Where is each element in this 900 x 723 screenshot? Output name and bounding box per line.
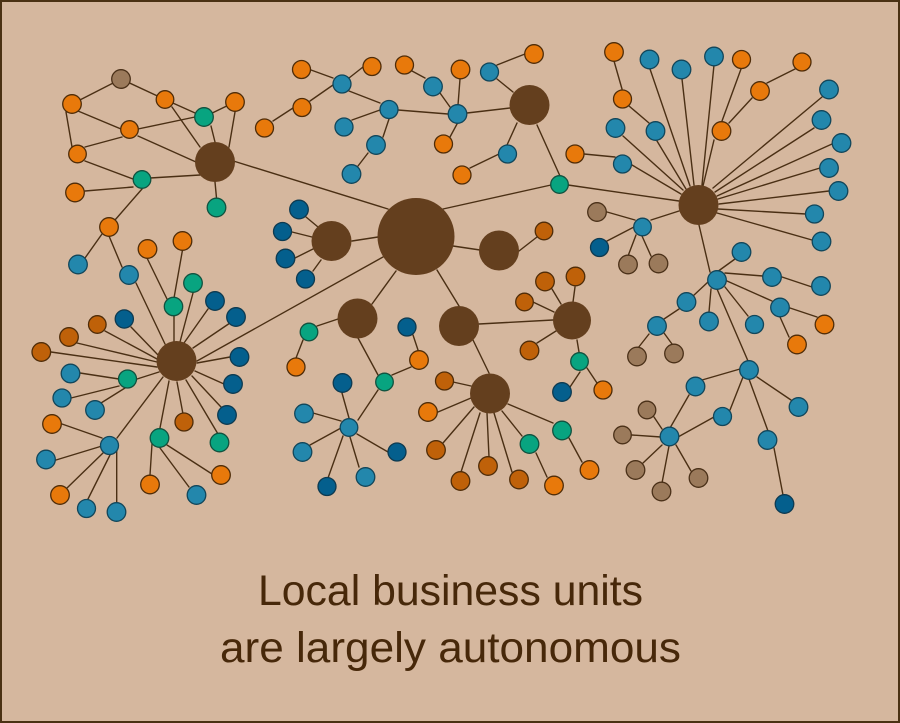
caption: Local business units bbox=[258, 567, 643, 615]
caption: are largely autonomous bbox=[220, 624, 681, 672]
cluster: top right nodes bbox=[566, 43, 851, 274]
cluster: top left nodes bbox=[63, 70, 244, 284]
cluster: lower left nodes bbox=[32, 274, 249, 521]
cluster: lower center nodes bbox=[419, 267, 612, 495]
cluster: top middle nodes bbox=[256, 45, 568, 193]
connector lines bbox=[51, 54, 832, 503]
hub nodes bbox=[156, 85, 718, 414]
central hub bbox=[378, 198, 454, 275]
caption bbox=[220, 567, 681, 672]
cluster: center nodes bbox=[274, 200, 553, 495]
cluster: lower right nodes bbox=[614, 243, 834, 513]
